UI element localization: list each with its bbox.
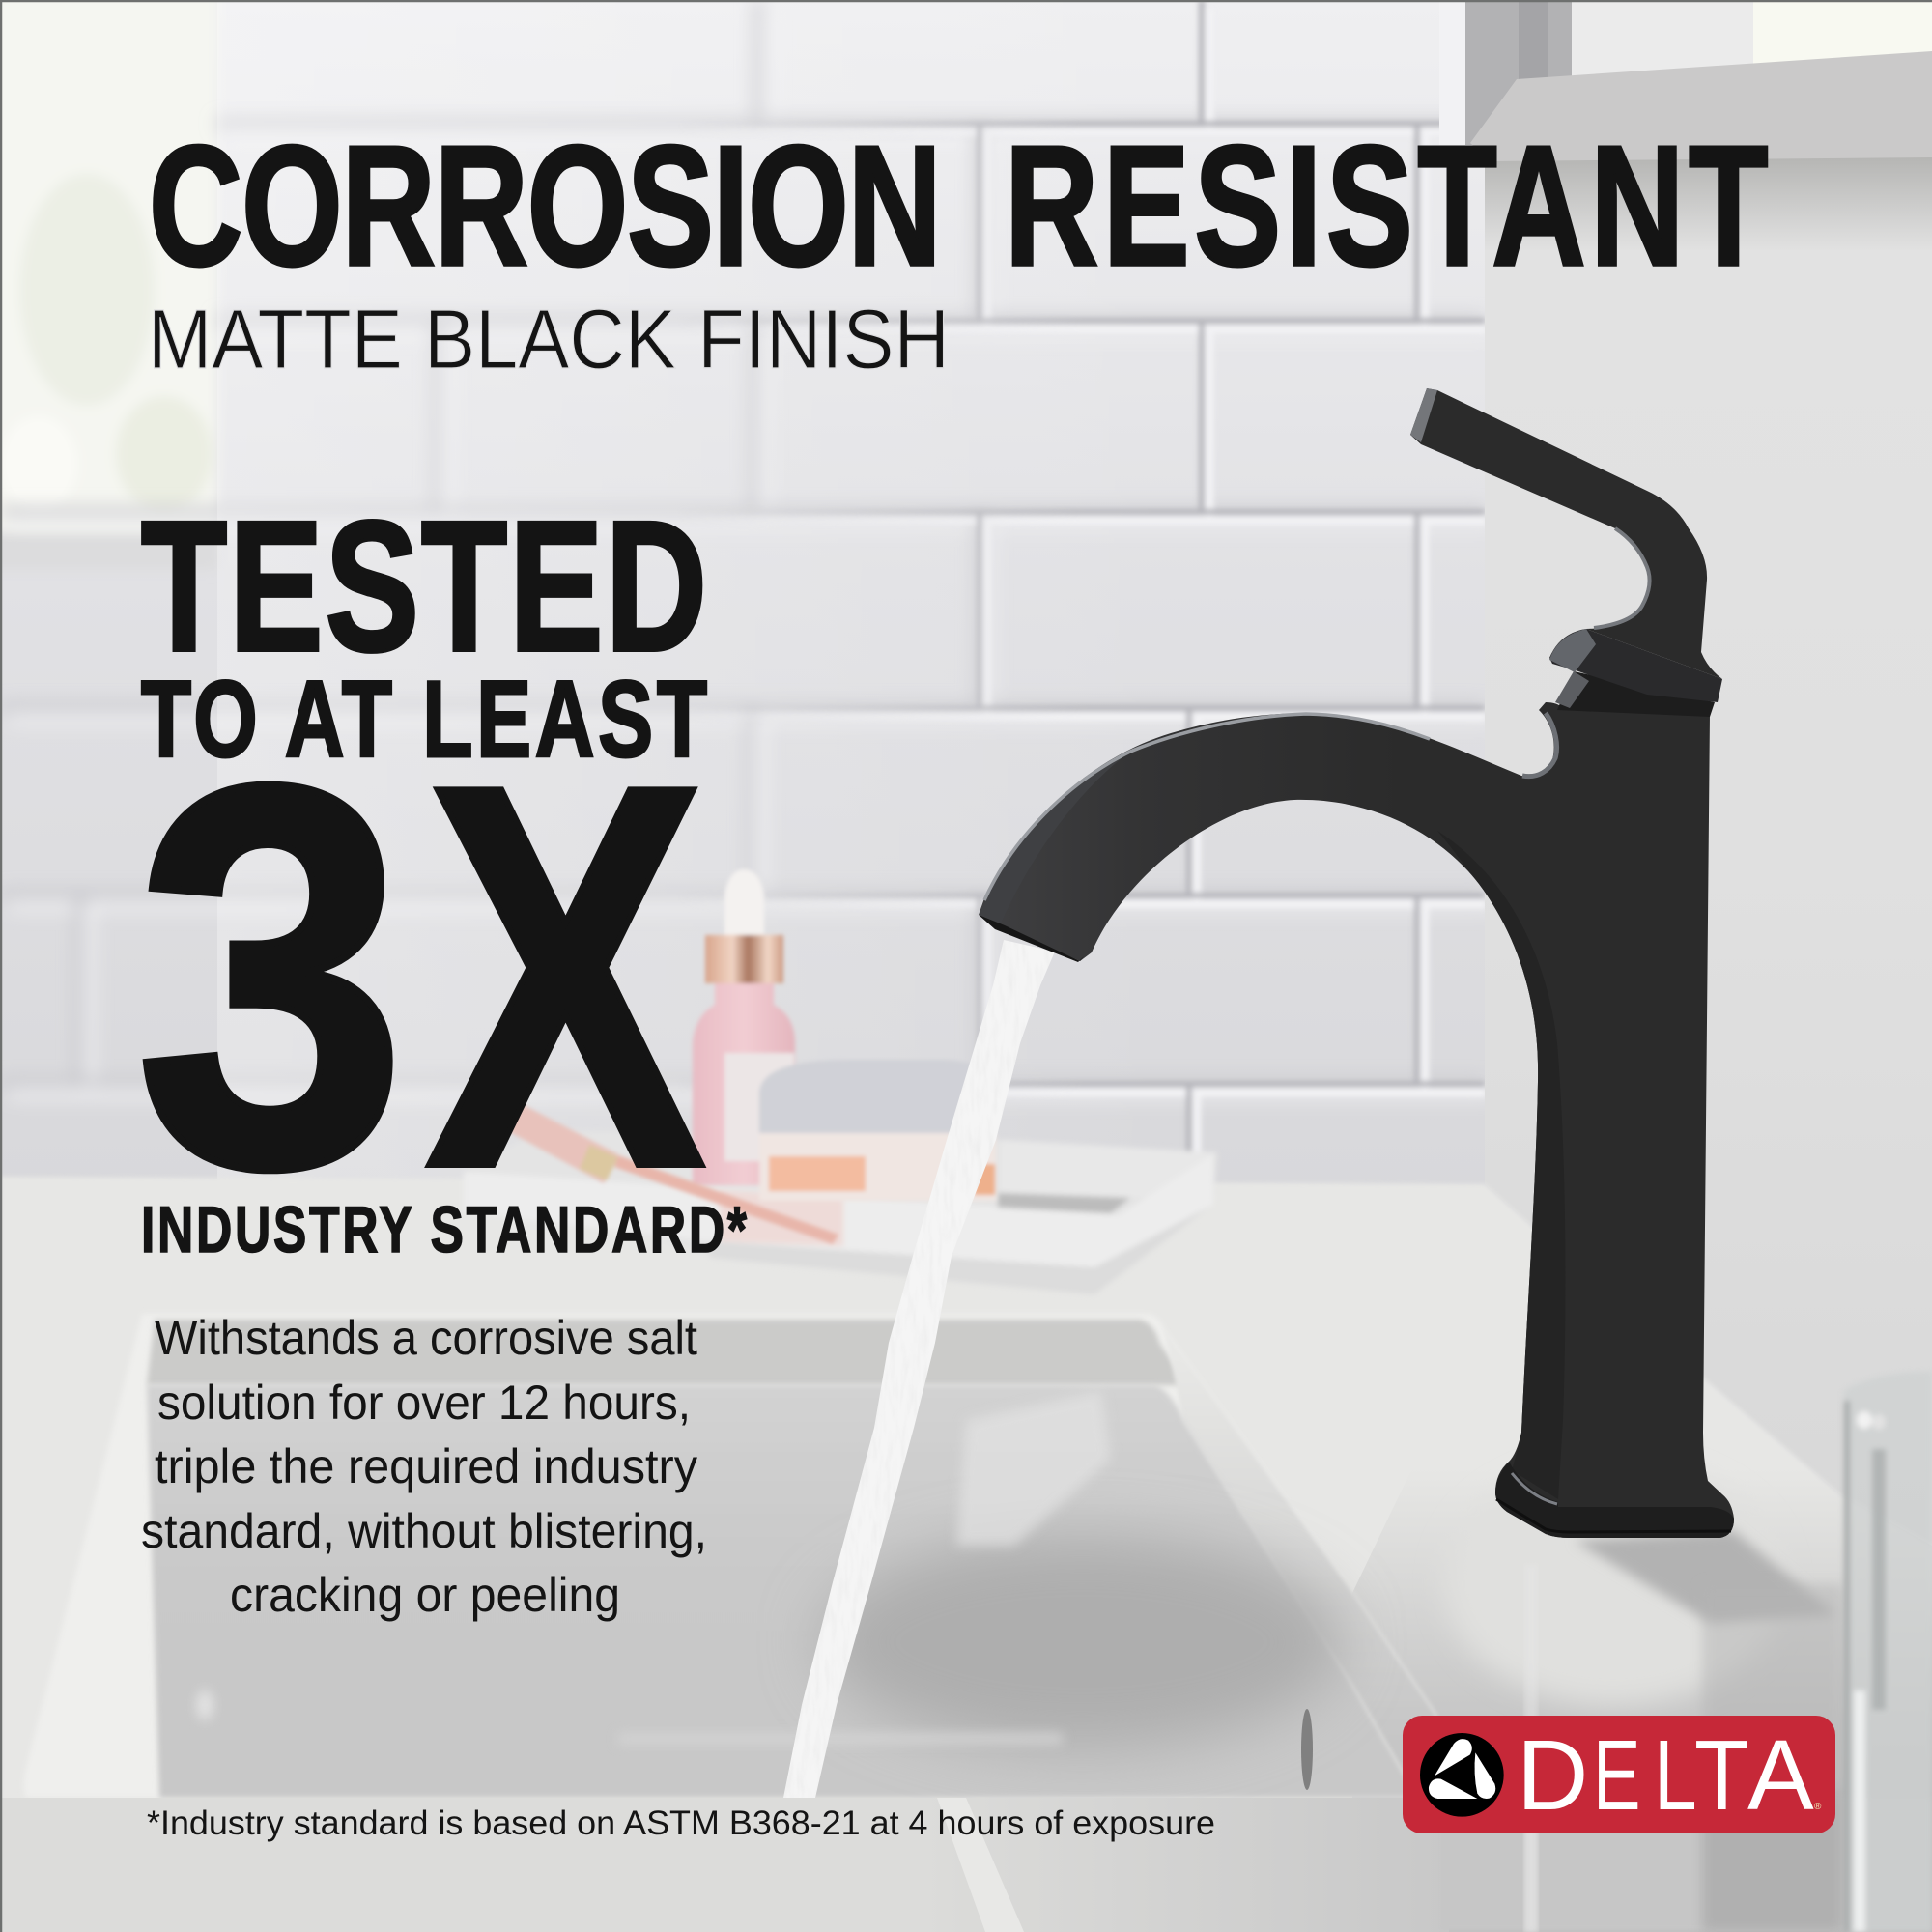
side face of neck xyxy=(1437,831,1565,1499)
spout highlight band xyxy=(980,752,1130,923)
wordmark: T xyxy=(1694,1719,1749,1831)
3X: letter: X xyxy=(426,673,707,1280)
wordmark: D xyxy=(1517,1719,1588,1831)
description text xyxy=(141,1311,707,1622)
sink rim xyxy=(23,1314,1435,1798)
description text: Withstands a corrosive salt xyxy=(155,1311,697,1365)
serum bottle xyxy=(693,869,795,1185)
to at least: TO AT LEAST xyxy=(141,660,707,781)
logo: Delta xyxy=(1403,1716,1835,1833)
right side wall xyxy=(1485,155,1932,1546)
subway tiles, soft layer xyxy=(0,0,1493,1094)
basin xyxy=(147,1385,1418,1798)
right rim wall xyxy=(1164,1329,1435,1798)
handle lever xyxy=(1410,388,1722,679)
front edge xyxy=(0,1798,1449,1932)
reflection strips xyxy=(1524,1565,1538,1932)
title xyxy=(148,111,1768,386)
industry standard: INDUSTRY STANDARD* xyxy=(141,1192,747,1266)
neck highlight xyxy=(1522,713,1557,777)
stem xyxy=(1557,671,1715,717)
subway tiles, sharper layer on the right xyxy=(796,2,1485,1151)
water stream xyxy=(783,940,1055,1798)
handle base cap xyxy=(1549,629,1722,702)
base plate lower line xyxy=(1496,1499,1731,1532)
rim band xyxy=(147,1320,1188,1385)
window: blurred garden view xyxy=(0,0,217,570)
basin reflections xyxy=(196,1391,1111,1744)
description text: cracking or peeling xyxy=(230,1568,620,1622)
white veil on the left wall xyxy=(217,0,1183,1188)
footnote: *Industry standard is based on ASTM B368-21 at 4 hours of exposure xyxy=(147,1804,1215,1842)
counter right of sink xyxy=(1352,1382,1932,1932)
lever inner highlight xyxy=(1594,528,1650,628)
makeup brush xyxy=(497,1096,838,1244)
faucet xyxy=(979,388,1734,1538)
plinth highlight xyxy=(1512,1473,1557,1504)
heading word: resistant: RESISTANT xyxy=(1005,111,1768,301)
icon: Delta triangle mark xyxy=(1420,1733,1504,1817)
wordmark xyxy=(1517,1719,1814,1832)
wordmark: L xyxy=(1654,1719,1697,1831)
wordmark: E xyxy=(1593,1720,1640,1832)
3X: digit: 3 xyxy=(135,673,407,1280)
faucet shadow on counter xyxy=(1575,1530,1836,1623)
faucet body and spout xyxy=(979,702,1734,1538)
lever tip highlight xyxy=(1410,388,1437,442)
wordmark: A xyxy=(1747,1719,1814,1831)
description text: triple the required industry xyxy=(155,1439,697,1493)
top right window and posts xyxy=(1439,0,1932,145)
tested: TESTED xyxy=(141,484,707,691)
sink xyxy=(0,1314,1932,1932)
base plate xyxy=(1495,1462,1734,1538)
description text: standard, without blistering, xyxy=(141,1504,707,1558)
spout tip xyxy=(979,915,1084,962)
shelf xyxy=(1470,51,1932,161)
countertop xyxy=(0,1177,1932,1932)
heading word: corrosion: CORROSION xyxy=(149,111,942,301)
tray xyxy=(464,1130,1217,1294)
description text: solution for over 12 hours, xyxy=(157,1376,691,1430)
registered mark: ® xyxy=(1814,1802,1822,1812)
subheading: matte black finish: MATTE BLACK FINISH xyxy=(148,293,950,386)
overflow drain xyxy=(1301,1709,1313,1790)
basin shadow xyxy=(821,1536,1343,1748)
glass on right edge xyxy=(1844,1372,1932,1932)
claim: tested to at least 3X industry standard xyxy=(135,484,747,1280)
cream jar xyxy=(759,1060,996,1201)
